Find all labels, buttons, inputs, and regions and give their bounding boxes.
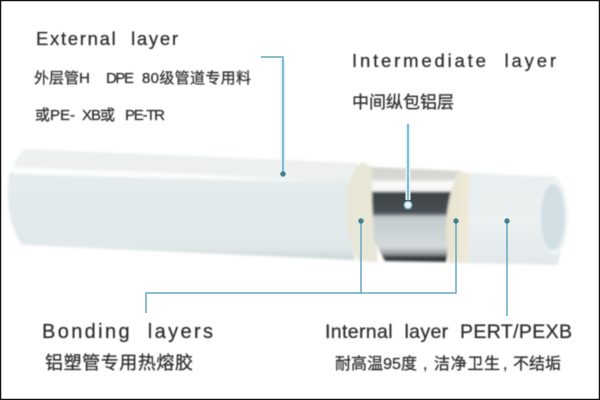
left bonding layer collar (346, 162, 378, 262)
outer layer body (8, 172, 355, 260)
text: external layer: PE-TR (125, 107, 165, 124)
text: intermediate layer (352, 50, 556, 112)
highlight on outer layer (13, 167, 340, 184)
aluminium layer (372, 167, 462, 262)
text: bonding layers (42, 321, 213, 373)
pipe end rim (542, 179, 568, 255)
leader lines (146, 57, 510, 316)
text: internal layer: 不结垢 (513, 355, 561, 373)
text: external layer: 80级管道专用料 (142, 70, 251, 87)
text: intermediate layer: Intermediate layer (352, 50, 556, 71)
text: external layer: XB或 (82, 107, 115, 124)
leader: external layer (261, 57, 286, 177)
pipe illustration (8, 149, 568, 265)
pipe end opening (541, 184, 565, 250)
text: intermediate layer: 中间纵包铝层 (352, 93, 454, 112)
text: internal layer: , (423, 356, 427, 373)
text: external layer (34, 28, 251, 124)
text: external layer: DPE (106, 70, 134, 87)
text: internal layer: 洁净卫生 (434, 355, 500, 373)
text: external layer: External layer (36, 28, 178, 49)
leader: intermediate layer (404, 124, 412, 209)
text: internal layer: Internal layer PERT/PEXB (325, 321, 572, 343)
leader: bonding layers (146, 218, 459, 313)
outer layer top band (13, 149, 358, 190)
text: internal layer: , (503, 356, 507, 373)
text: external layer: 或PE- (35, 107, 75, 124)
right bonding layer (446, 171, 474, 263)
leader: internal layer (504, 218, 510, 316)
text: external layer: 外层管H (34, 70, 90, 87)
text: internal layer (325, 321, 572, 373)
text: bonding layers: 铝塑管专用热熔胶 (45, 353, 193, 373)
text: bonding layers: Bonding layers (42, 321, 213, 343)
inner layer (468, 173, 564, 265)
text: internal layer: 耐高温95度 (335, 355, 417, 373)
